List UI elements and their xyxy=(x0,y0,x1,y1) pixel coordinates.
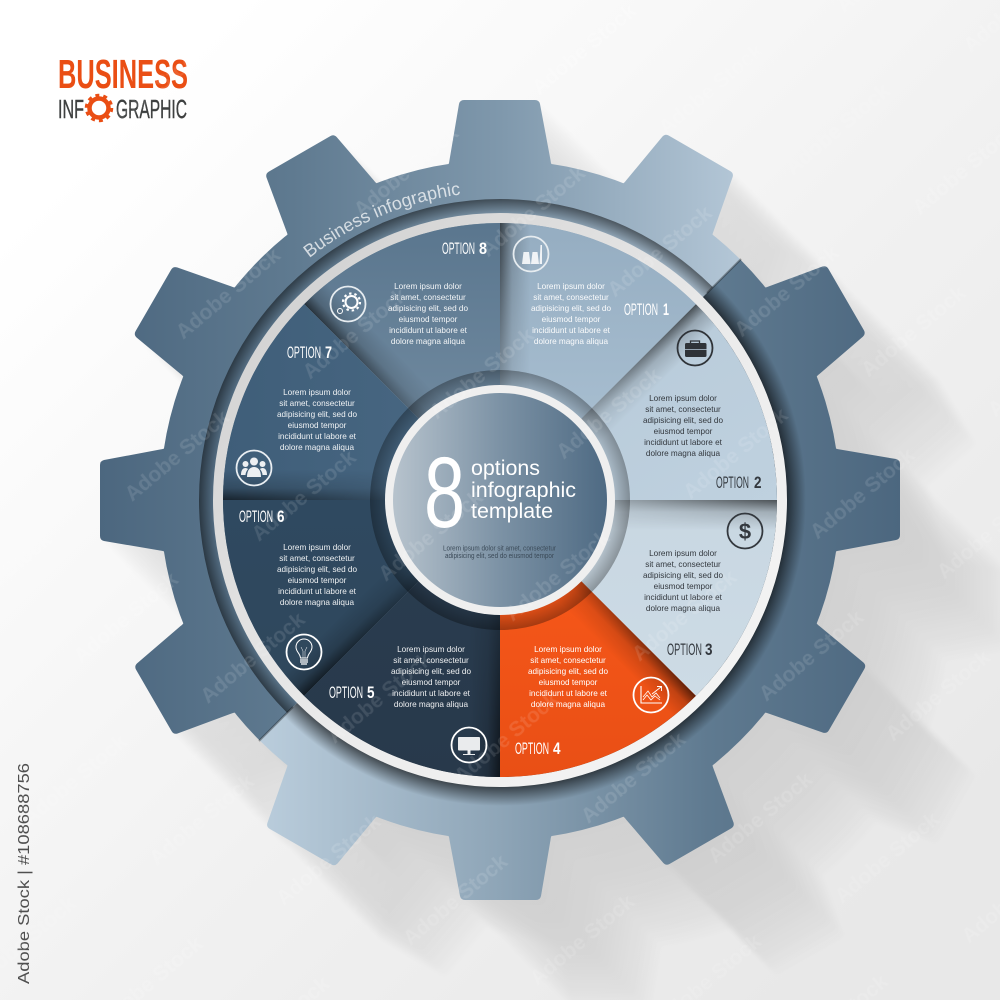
option 5: Lorem ipsum dolor xyxy=(397,645,465,654)
option 2: eiusmod tempor xyxy=(654,427,713,436)
icon: people xyxy=(236,450,272,486)
hub white ring xyxy=(385,385,615,615)
option 8: Lorem ipsum dolor xyxy=(394,282,462,291)
option 2 xyxy=(643,394,762,492)
option 5: incididunt ut labore et xyxy=(392,689,471,698)
option 2: incididunt ut labore et xyxy=(644,438,723,447)
option 7: dolore magna aliqua xyxy=(280,443,355,452)
logo xyxy=(58,51,188,124)
option 1: Lorem ipsum dolor xyxy=(537,282,605,291)
icon: factory xyxy=(514,236,548,272)
option 4 xyxy=(515,645,608,758)
icon: gears xyxy=(330,286,366,322)
option 1: sit amet, consectetur xyxy=(533,293,609,302)
option 2: Lorem ipsum dolor xyxy=(649,394,717,403)
hub description xyxy=(443,546,557,560)
option 5: sit amet, consectetur xyxy=(393,656,469,665)
option 1: 1 xyxy=(663,300,669,319)
option 4: OPTION xyxy=(515,739,549,758)
option 2: dolore magna aliqua xyxy=(646,449,721,458)
logo: INF xyxy=(58,94,84,124)
hub shadow ring xyxy=(370,370,630,630)
option 7: OPTION xyxy=(287,343,321,362)
white ring xyxy=(218,218,782,782)
option 3: incididunt ut labore et xyxy=(644,593,723,602)
option 1: incididunt ut labore et xyxy=(532,326,611,335)
option 6: 6 xyxy=(277,507,284,526)
option 8: adipisicing elit, sed do xyxy=(388,304,468,313)
hub description: adipisicing elit, sed do eiusmod tempor xyxy=(445,553,555,560)
hub title xyxy=(471,457,576,523)
option 1: adipisicing elit, sed do xyxy=(531,304,611,313)
option 6: sit amet, consectetur xyxy=(279,554,355,563)
option 3: OPTION xyxy=(667,640,702,659)
option 4: incididunt ut labore et xyxy=(529,689,608,698)
stock id: Adobe Stock | #108688756 xyxy=(16,763,33,984)
option 7: Lorem ipsum dolor xyxy=(283,388,351,397)
icon: monitor xyxy=(452,728,486,762)
option 6: Lorem ipsum dolor xyxy=(283,543,351,552)
recess shadow ring xyxy=(194,194,806,806)
hub number 8: 8 xyxy=(424,437,465,549)
option 8: OPTION xyxy=(442,239,475,258)
option 3: Lorem ipsum dolor xyxy=(649,549,717,558)
option 6: eiusmod tempor xyxy=(288,576,347,585)
icon: chart xyxy=(634,678,668,712)
option 2: OPTION xyxy=(716,473,749,492)
icon: dollar xyxy=(728,514,762,548)
option 6: incididunt ut labore et xyxy=(278,587,357,596)
option 5: adipisicing elit, sed do xyxy=(391,667,471,676)
option 3: adipisicing elit, sed do xyxy=(643,571,723,580)
option 1: OPTION xyxy=(624,300,658,319)
option 3: 3 xyxy=(705,640,712,659)
option 4: dolore magna aliqua xyxy=(531,700,606,709)
option 4: 4 xyxy=(553,739,561,758)
option 4: Lorem ipsum dolor xyxy=(534,645,602,654)
wedges xyxy=(223,223,777,777)
option 7: adipisicing elit, sed do xyxy=(277,410,357,419)
option 4: adipisicing elit, sed do xyxy=(528,667,608,676)
option 5: OPTION xyxy=(329,683,363,702)
hub title: options xyxy=(471,457,540,480)
option 4: eiusmod tempor xyxy=(539,678,598,687)
option 8: eiusmod tempor xyxy=(399,315,458,324)
option 7 xyxy=(277,343,357,452)
option 3: eiusmod tempor xyxy=(654,582,713,591)
option 7: 7 xyxy=(325,343,332,362)
option 5: dolore magna aliqua xyxy=(394,700,469,709)
option 8: incididunt ut labore et xyxy=(389,326,468,335)
icon: dollar: $ xyxy=(739,519,751,544)
option 8: 8 xyxy=(479,239,487,258)
option 7: eiusmod tempor xyxy=(288,421,347,430)
logo: GRAPHIC xyxy=(116,94,187,124)
option 5: eiusmod tempor xyxy=(402,678,461,687)
option 4: sit amet, consectetur xyxy=(530,656,606,665)
hub title: infographic xyxy=(471,479,576,502)
option 8: sit amet, consectetur xyxy=(390,293,466,302)
option 1: eiusmod tempor xyxy=(542,315,601,324)
option 6: dolore magna aliqua xyxy=(280,598,355,607)
icon: briefcase xyxy=(678,330,712,366)
hub title: template xyxy=(471,500,553,523)
option 6 xyxy=(239,507,357,607)
option 3: dolore magna aliqua xyxy=(646,604,721,613)
option 2: adipisicing elit, sed do xyxy=(643,416,723,425)
option 3 xyxy=(643,549,723,659)
option 2: 2 xyxy=(754,473,762,492)
option 1: dolore magna aliqua xyxy=(534,337,609,346)
gear: lower-right piece xyxy=(260,260,900,900)
hub disk xyxy=(393,393,607,607)
option 6: OPTION xyxy=(239,507,273,526)
option 5 xyxy=(329,645,471,709)
gear: upper-left piece xyxy=(100,100,740,740)
option 5: 5 xyxy=(367,683,374,702)
option 7: incididunt ut labore et xyxy=(278,432,357,441)
option 2: sit amet, consectetur xyxy=(645,405,721,414)
logo: BUSINESS xyxy=(58,51,188,97)
hub description: Lorem ipsum dolor sit amet, consectetur xyxy=(443,546,557,552)
option 8: dolore magna aliqua xyxy=(391,337,466,346)
option 8 xyxy=(388,239,487,346)
option 6: adipisicing elit, sed do xyxy=(277,565,357,574)
icon: light bulb xyxy=(286,634,322,670)
option 7: sit amet, consectetur xyxy=(279,399,355,408)
option 1 xyxy=(531,282,669,346)
curved heading: Business infographic xyxy=(303,183,460,258)
option 3: sit amet, consectetur xyxy=(645,560,721,569)
